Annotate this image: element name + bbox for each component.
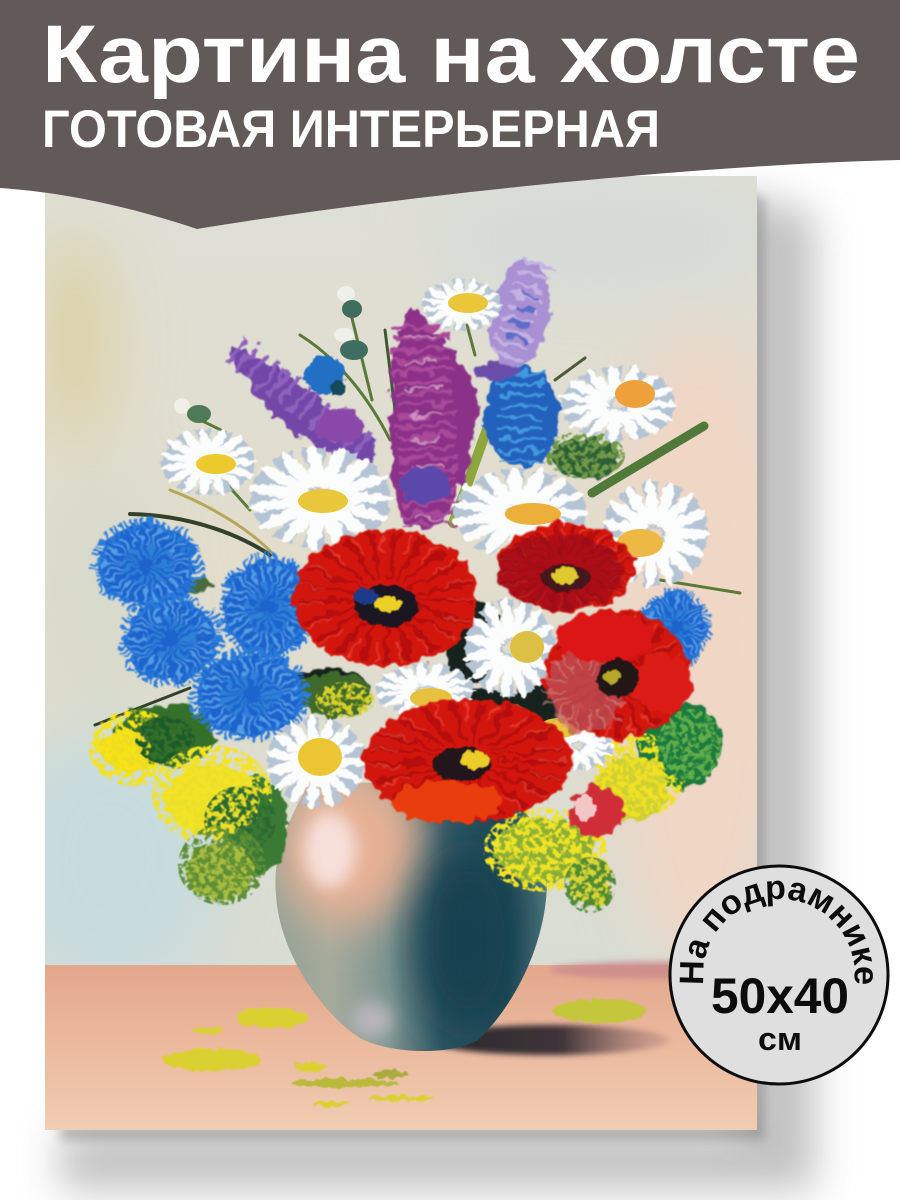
lupines <box>228 254 560 530</box>
table <box>45 965 757 1130</box>
red poppies <box>293 524 692 837</box>
blue cornflowers <box>98 524 708 736</box>
table horizon tint <box>552 958 670 980</box>
subtitle: ГОТОВАЯ ИНТЕРЬЕРНАЯ <box>42 100 660 159</box>
yellow-green foliage <box>89 431 722 913</box>
vase shadow <box>430 1025 670 1055</box>
canvas shadow <box>60 190 815 1190</box>
title: Картина на холсте <box>42 9 860 100</box>
badge circle <box>670 866 888 1084</box>
lavender lupine <box>486 256 556 368</box>
background tints <box>45 219 757 965</box>
size value: 50x40 <box>711 968 849 1024</box>
dark gaps between flowers <box>166 577 560 727</box>
table petals <box>164 999 646 1107</box>
daisy centres <box>196 293 663 776</box>
painting background <box>45 170 757 970</box>
purple lupine left <box>228 345 375 462</box>
vase painted tones <box>278 765 520 1038</box>
curved label: На подрамнике <box>680 880 873 984</box>
unit: см <box>758 1021 802 1057</box>
yellow flecks <box>89 431 722 913</box>
blue bud <box>305 356 346 395</box>
banner shape <box>0 0 900 229</box>
poppy centres <box>353 564 639 822</box>
size badge <box>668 864 890 1086</box>
small buds <box>174 286 368 423</box>
blue lupine <box>475 362 560 467</box>
stems and leaves <box>95 310 740 725</box>
banner <box>0 0 900 229</box>
painting <box>45 176 757 1130</box>
vase <box>275 765 547 1051</box>
magenta lupine <box>389 306 478 530</box>
daisies <box>159 278 710 809</box>
